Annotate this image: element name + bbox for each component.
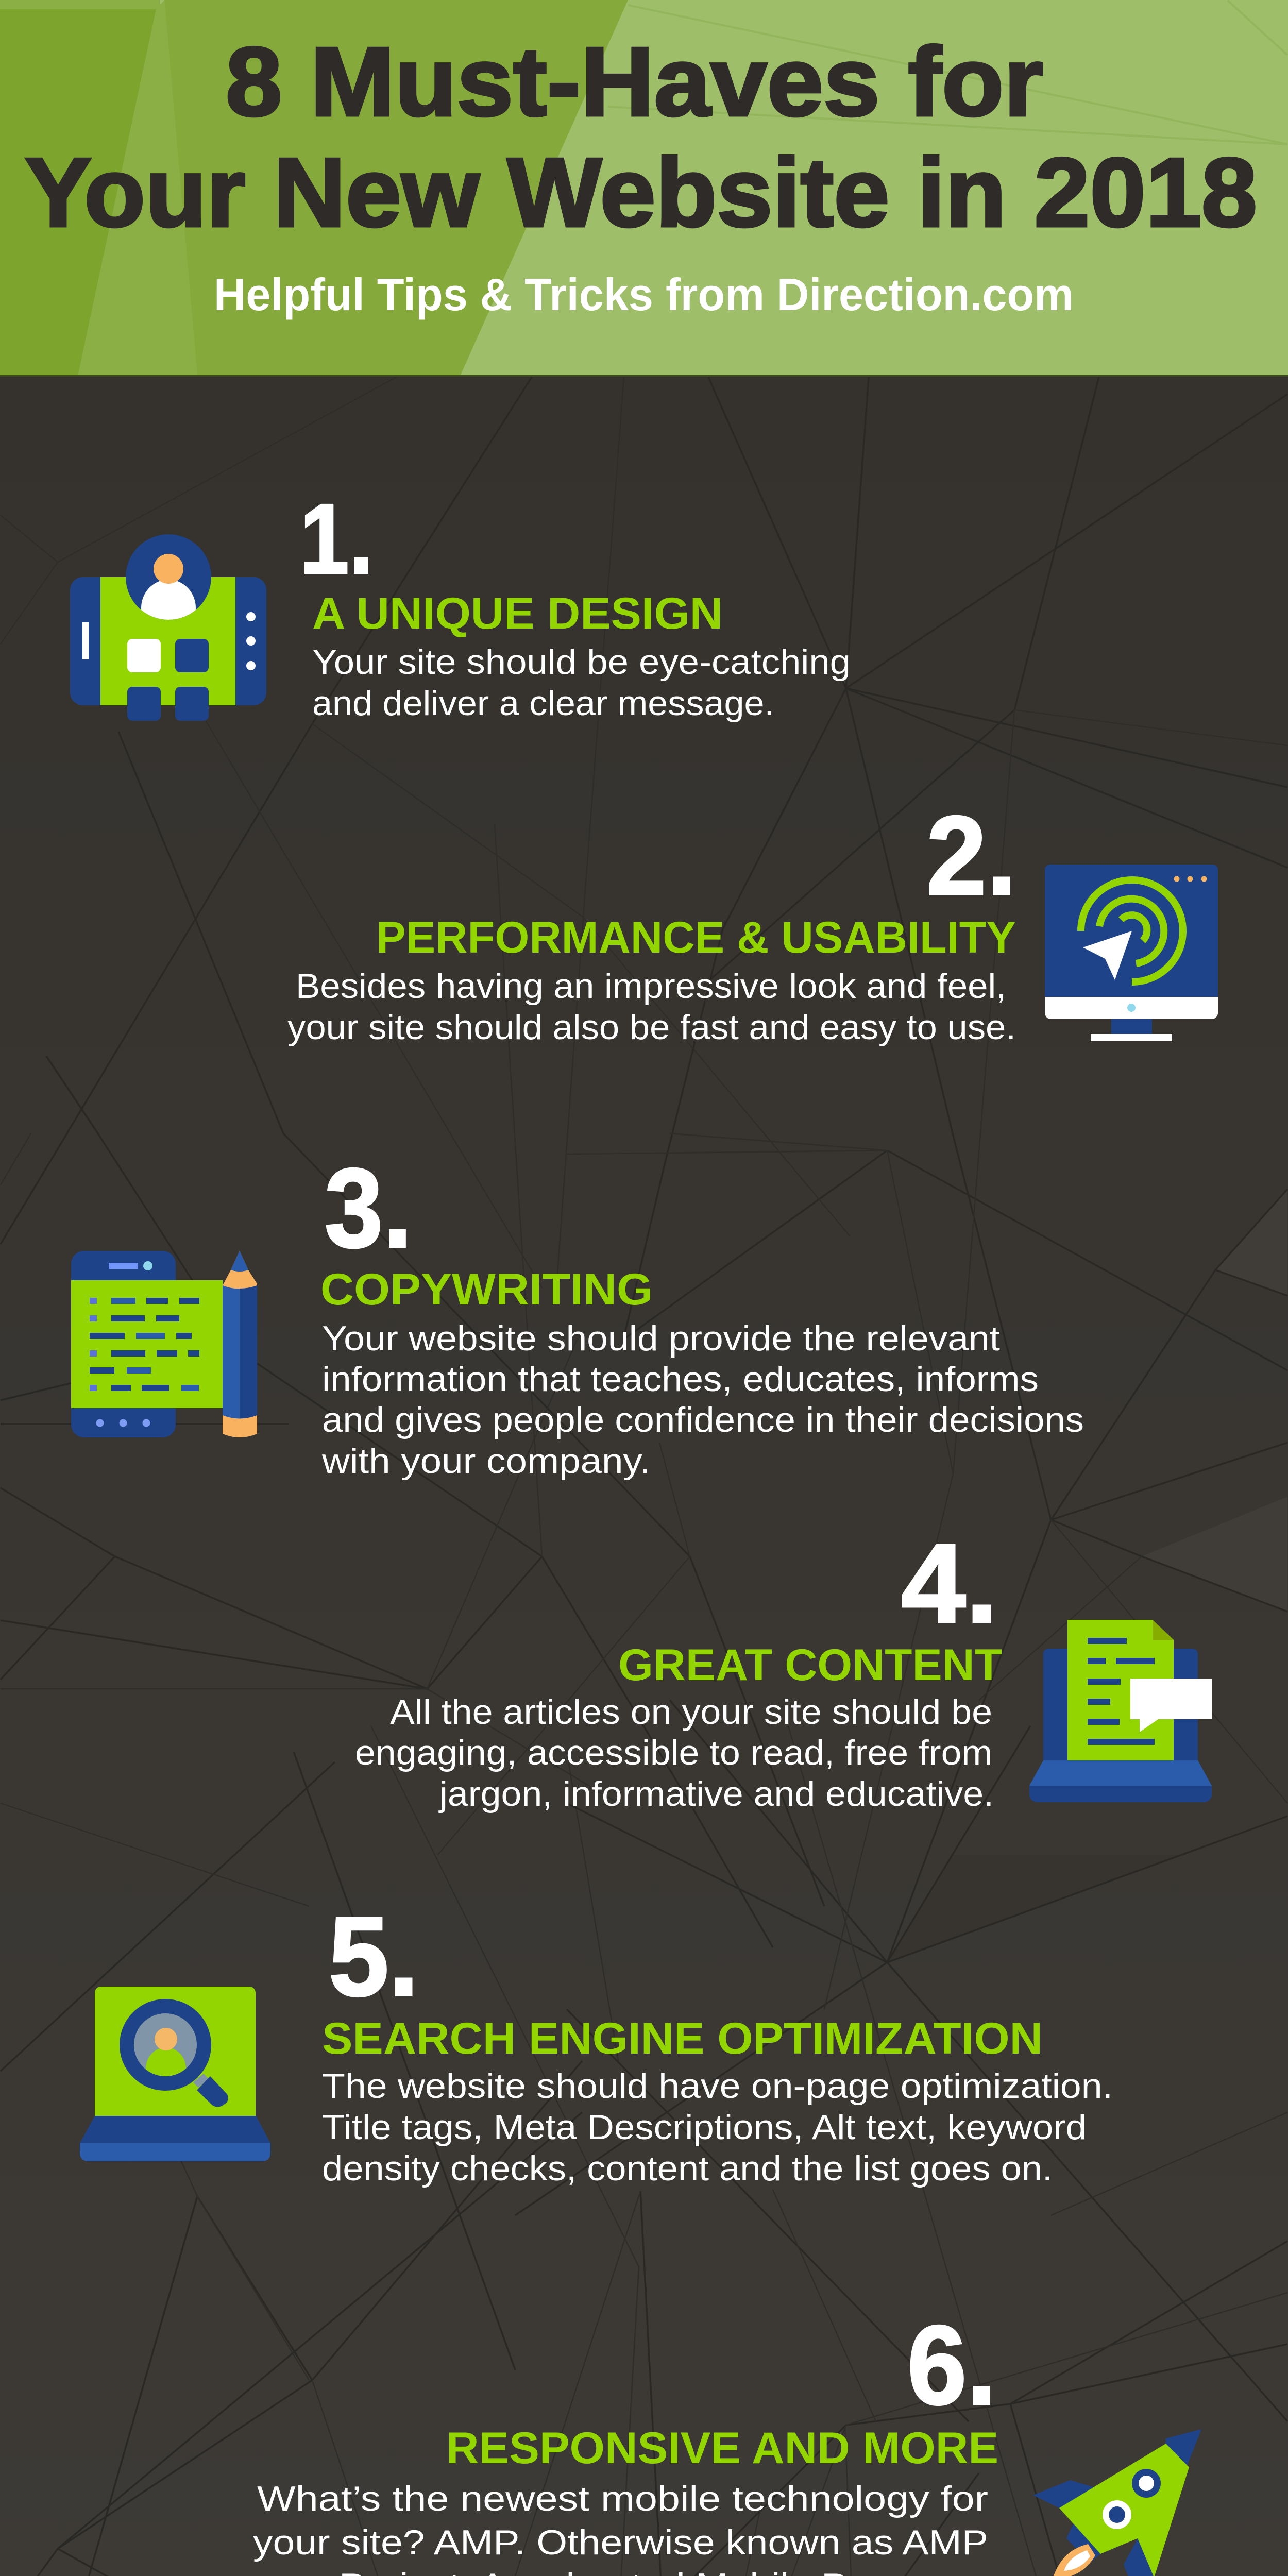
number 1: 1. [300, 483, 374, 594]
body text: Title tags, Meta Descriptions, Alt text, keyword [322, 2108, 1087, 2147]
icon: laptop with document and speech bubble [1029, 1620, 1212, 1802]
body text [355, 1692, 994, 1814]
body text: jargon, informative and educative. [438, 1774, 994, 1814]
icon: rocket [1033, 2429, 1201, 2576]
body text: engaging, accessible to read, free from [355, 1733, 992, 1772]
number 5: 5. [329, 1894, 419, 2020]
panel: 5 search engine optimization [80, 1894, 1113, 2188]
body text: and gives people confidence in their decisions [322, 1400, 1084, 1439]
panel: 6 responsive and more [234, 2303, 1201, 2576]
panel: 1 a unique design [70, 483, 851, 723]
body text: density checks, content and the list goes on. [322, 2149, 1053, 2188]
title [25, 27, 1257, 247]
header banner [0, 0, 1288, 377]
title: 8 Must-Haves for [226, 27, 1043, 137]
heading: A UNIQUE DESIGN [312, 589, 723, 638]
body text: Your website should provide the relevant [322, 1319, 1000, 1358]
body text [321, 1319, 1084, 1481]
body text [322, 2066, 1113, 2188]
heading: GREAT CONTENT [618, 1640, 1002, 1690]
panel: 3 copywriting [71, 1146, 1084, 1481]
panel: 2 performance and usability [287, 793, 1218, 1047]
body text: All the articles on your site should be [390, 1692, 992, 1732]
number 4: 4. [901, 1521, 998, 1647]
title: Your New Website in 2018 [25, 138, 1257, 247]
body text [287, 967, 1016, 1047]
heading: RESPONSIVE AND MORE [446, 2424, 998, 2473]
body text: information that teaches, educates, informs [322, 1360, 1039, 1399]
icon: phone with page and pencil [71, 1251, 257, 1437]
number 2: 2. [926, 793, 1016, 919]
body text [312, 642, 851, 723]
heading: PERFORMANCE & USABILITY [376, 913, 1016, 962]
body text: with your company. [321, 1442, 650, 1481]
icon: monitor with radar cursor [1045, 865, 1218, 1041]
body text: and deliver a clear message. [312, 684, 774, 723]
icon: laptop with magnifier over user [80, 1987, 270, 2161]
heading: COPYWRITING [320, 1265, 653, 1314]
body text: Besides having an impressive look and feel, [296, 967, 1006, 1006]
body text: The website should have on-page optimization. [322, 2066, 1113, 2106]
body text: What’s the newest mobile technology for [257, 2479, 988, 2518]
heading: SEARCH ENGINE OPTIMIZATION [322, 2014, 1043, 2063]
body text [234, 2479, 996, 2576]
number 6: 6. [907, 2303, 996, 2428]
body text: your site should also be fast and easy to use. [287, 1008, 1016, 1047]
body text: your site? AMP. Otherwise known as AMP [253, 2523, 988, 2562]
subtitle: Helpful Tips & Tricks from Direction.com [214, 269, 1074, 320]
body text: Your site should be eye-catching [312, 642, 851, 682]
panel: 4 great content [355, 1521, 1212, 1814]
icon: phone with user profile [70, 534, 266, 721]
number 3: 3. [325, 1146, 412, 1271]
